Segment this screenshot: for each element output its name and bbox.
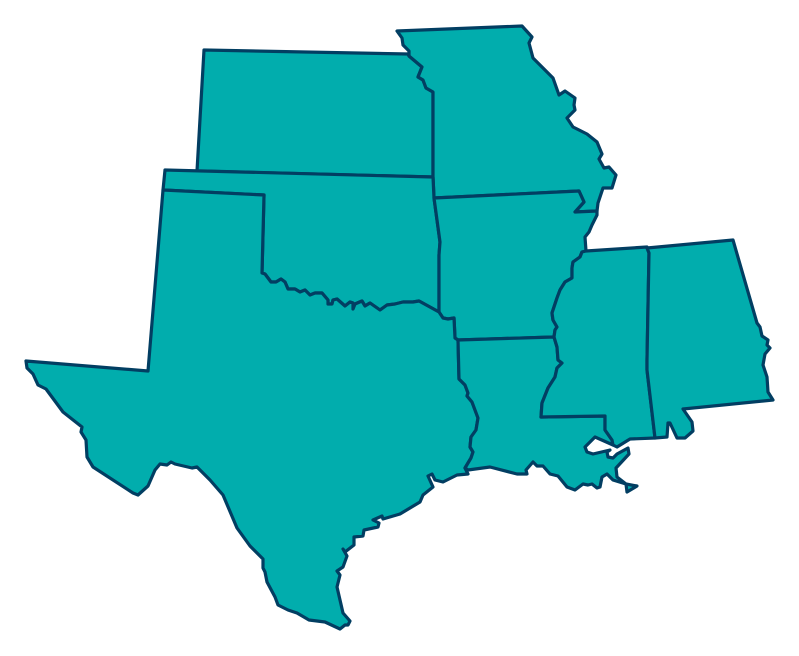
state: Missouri [397, 26, 616, 212]
state: Kansas [197, 50, 433, 177]
state: Arkansas [434, 191, 597, 340]
state: Texas [26, 190, 478, 629]
state: Mississippi [541, 247, 655, 447]
state: Louisiana [458, 337, 637, 492]
state: Oklahoma [163, 170, 440, 312]
state: Alabama [647, 240, 773, 438]
